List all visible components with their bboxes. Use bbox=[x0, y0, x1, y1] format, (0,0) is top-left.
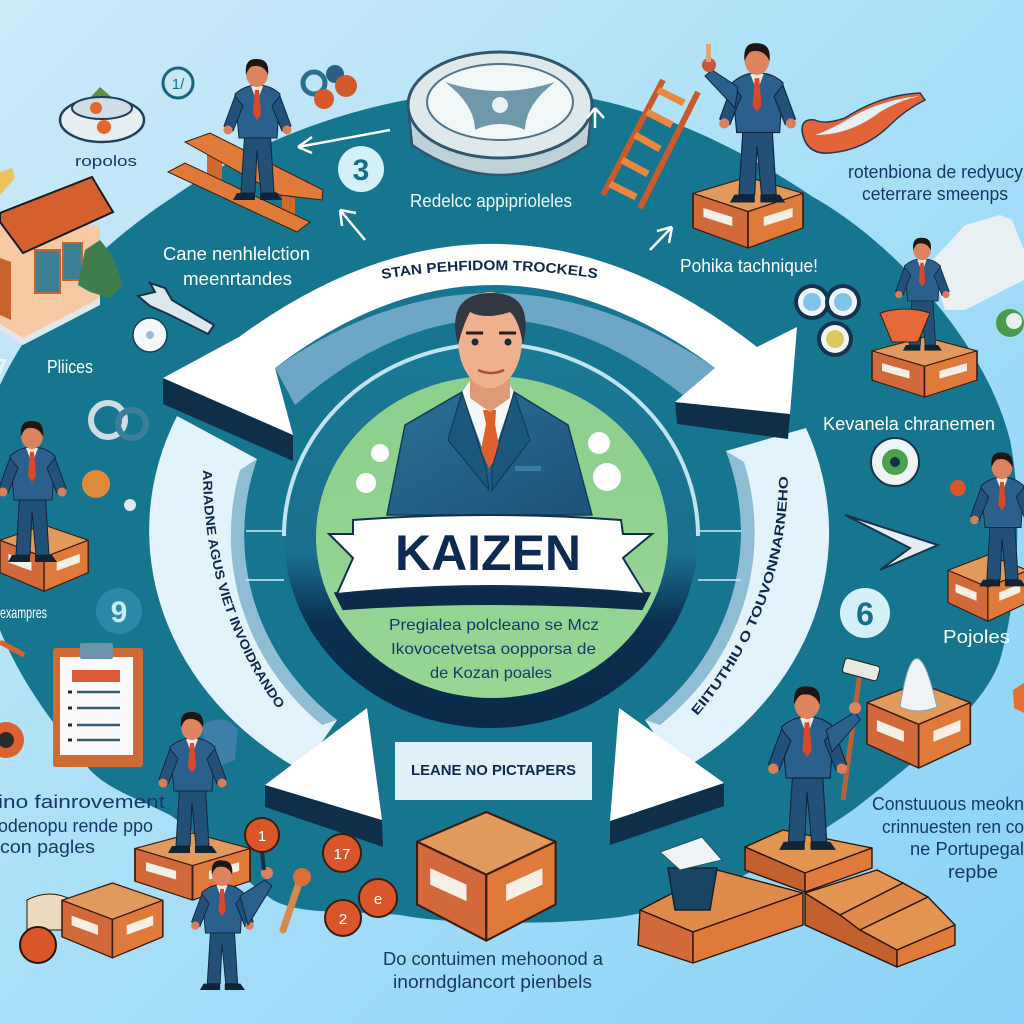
labels: outer text: Constuuous meokn bbox=[872, 794, 1024, 814]
icon: mussel top left bbox=[60, 87, 144, 142]
labels: outer text: ceterrare smeenps bbox=[862, 184, 1008, 204]
figure: wooden stairs bbox=[638, 830, 955, 967]
icon: green badge bbox=[871, 438, 919, 486]
labels: outer text: Pohika tachnique! bbox=[680, 256, 818, 276]
icon: gear left bbox=[0, 722, 24, 758]
number 9 bbox=[96, 588, 142, 634]
figure: man right bbox=[948, 452, 1024, 621]
number 9: 9 bbox=[111, 596, 127, 629]
panel: clipboard bbox=[53, 643, 143, 767]
icon: white puzzle marks bbox=[356, 432, 621, 493]
labels: outer text: ropolos bbox=[75, 153, 137, 170]
heading: right arc text: EIITUTHIU O TOUVONNARNEHO bbox=[691, 476, 788, 716]
heading: bottom arc: LEANE NO PICTAPERS bbox=[411, 762, 576, 779]
figure: man with paddle bbox=[191, 852, 273, 990]
icon: red number coins: 17 bbox=[334, 846, 350, 863]
icon: red number coins bbox=[245, 818, 397, 936]
labels: outer text: Do contuimen mehoonod a bbox=[383, 949, 604, 969]
text block: central caption: Pregialea polcleano se Mcz bbox=[389, 617, 599, 634]
icon: badge 1: 1/ bbox=[172, 76, 185, 93]
icon: open box with cup bbox=[20, 883, 163, 963]
icon: green gear right bbox=[996, 309, 1024, 337]
figure: man bottom left on box bbox=[135, 712, 250, 900]
figure: man top right bbox=[693, 43, 803, 248]
labels: outer text: rotenbiona de redyucy bbox=[848, 162, 1023, 182]
number 3: 3 bbox=[353, 154, 369, 187]
arrow: up to medal bbox=[340, 210, 365, 240]
icon: medal top bbox=[408, 52, 592, 175]
number 3 bbox=[338, 146, 384, 192]
icon: orange splat right bbox=[1013, 683, 1024, 713]
labels: outer text: inorndglancort pienbels bbox=[393, 972, 592, 992]
icon: ladder bbox=[603, 80, 698, 208]
labels: outer text: meenrtandes bbox=[183, 269, 292, 289]
labels: outer text: ino fainrovement bbox=[0, 792, 165, 812]
figure: man left bbox=[0, 421, 88, 591]
icon: rings right bbox=[794, 284, 861, 357]
labels: outer text: ne Portupegal bbox=[910, 839, 1024, 859]
figure: large crate bbox=[417, 812, 556, 941]
labels: outer text: con pagles bbox=[0, 837, 95, 857]
banner: Kaizen bbox=[329, 515, 652, 606]
icon: orange stick left bbox=[0, 642, 24, 655]
icon: bucket with newspaper bbox=[660, 837, 722, 910]
text block: central caption: de Kozan poales bbox=[430, 665, 552, 682]
central businessman bbox=[387, 292, 592, 515]
arrow: toward technique bbox=[650, 227, 672, 250]
number 6 bbox=[840, 588, 890, 638]
labels: outer text: Kevanela chranemen bbox=[823, 414, 995, 434]
labels: outer text: Pojoles bbox=[943, 627, 1010, 647]
icon: scissors bbox=[845, 515, 938, 570]
figure: man with hammer and block bbox=[768, 658, 970, 850]
number 6: 6 bbox=[856, 596, 874, 632]
labels: outer text: Pliices bbox=[47, 357, 93, 377]
figure: man right with wings bbox=[872, 215, 1024, 397]
figure: man on bench bbox=[168, 59, 323, 232]
text block: central caption bbox=[389, 617, 599, 682]
panel: bottom arrows bbox=[265, 708, 724, 847]
heading: top arc: STAN PEHFIDOM TROCKELS bbox=[382, 260, 598, 278]
heading: left arc text: ARIADNE AGUS VIET INVOIDRANDO bbox=[203, 470, 284, 707]
panel: light arc bands bbox=[149, 293, 829, 800]
labels: outer text: Redelcc appiprioleles bbox=[410, 191, 572, 211]
icon: flower bbox=[133, 318, 167, 352]
text block: central caption: Ikovocetvetsa oopporsa de bbox=[391, 641, 596, 658]
icon: bent tool top right bbox=[802, 93, 925, 153]
labels: outer text: exampres bbox=[0, 605, 47, 622]
banner: Kaizen: KAIZEN bbox=[395, 525, 581, 581]
icon: yellow tag bbox=[0, 168, 15, 195]
icon: red number coins: 1 bbox=[258, 828, 266, 845]
icon: gears top bbox=[303, 65, 357, 109]
arrow: up near ladder bbox=[587, 108, 604, 128]
icon: red number coins: e bbox=[374, 891, 382, 908]
icon: house bbox=[0, 177, 123, 345]
labels: outer text: odenopu rende ppo bbox=[0, 816, 153, 836]
panel: top white arrow bbox=[163, 244, 797, 461]
labels: outer text: Cane nenhlelction bbox=[163, 244, 310, 264]
icon: badge 1 bbox=[163, 68, 193, 98]
icon: gears left bbox=[82, 403, 146, 511]
icon: wrench bbox=[138, 283, 214, 334]
labels: outer text: repbe bbox=[948, 862, 998, 882]
arrow: toward bench bbox=[298, 130, 390, 153]
panel: central circle bbox=[246, 344, 741, 728]
icon: red number coins: 2 bbox=[339, 911, 347, 928]
icon: stick bbox=[283, 868, 311, 930]
